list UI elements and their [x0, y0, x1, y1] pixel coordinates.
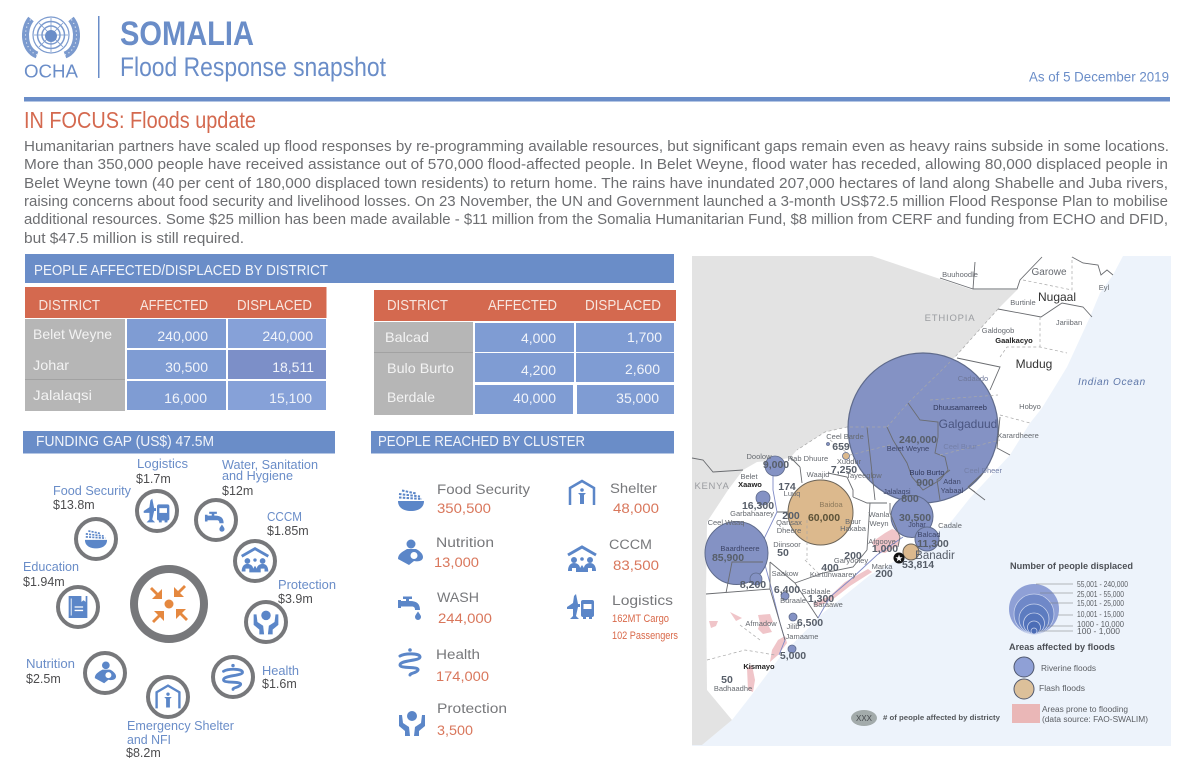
map: legend, number of people displaced: 55,001 - 240,000: [1077, 580, 1128, 589]
cluster: protection: Protection: [437, 701, 507, 716]
map: district values: 659: [832, 441, 850, 453]
map: place names: Jamaame: [786, 632, 818, 641]
table: right districts: Balcad: [385, 329, 429, 345]
map: legend, areas affected by floods: Riverine floods: [1041, 664, 1096, 673]
map: place names: Hakaba: [840, 524, 867, 533]
map: place names: Cadaado: [958, 374, 988, 383]
table: left districts: Belet Weyne: [33, 326, 112, 342]
funding: logistics: $1.7m: [136, 472, 171, 486]
map: place names: Afgooye: [868, 537, 896, 546]
map: place names: Mudug: [1016, 357, 1052, 371]
panel: funding gap wheel: [23, 457, 336, 760]
heading: funding gap: FUNDING GAP (US$) 47.5M: [36, 434, 214, 450]
funding: CCCM: $1.85m: [267, 524, 309, 538]
funding: water, sanitation and hygiene: [196, 458, 318, 540]
map: place names: Ceel Dheer: [964, 466, 1002, 475]
map: bubble Baardheere: [705, 522, 768, 584]
map: place names: Baidoa: [819, 500, 844, 509]
subtitle: Flood Response snapshot: [120, 52, 386, 82]
map: place names: Indian Ocean: [1078, 377, 1146, 388]
cluster: logistics: 102 Passengers: [612, 630, 678, 642]
map: place names: Bulo Burto: [909, 468, 945, 477]
map: place names: Garbahaarey: [730, 509, 774, 518]
heading: people affected/displaced by district: PEOPLE AFFECTED/DISPLACED BY DISTRICT: [34, 263, 328, 279]
map: place names: Diinsoor: [773, 540, 801, 549]
table: right districts: 40,000: [513, 390, 556, 406]
header rule: [24, 97, 1170, 102]
map: bubble Belet Weyne / Galgaduud: [848, 353, 998, 503]
funding: water, sanitation and hygiene: $12m: [222, 484, 253, 498]
map: place names: Xuddur: [837, 457, 862, 466]
map: district values: 53,814: [902, 559, 934, 571]
table: left districts: 15,100: [269, 390, 312, 406]
map: place names: Adan: [943, 477, 961, 486]
funding: education: Education: [23, 560, 79, 574]
map: neighbouring countries: [692, 256, 1017, 745]
funding: education: $1.94m: [23, 575, 65, 589]
panel: people reached by cluster: [398, 481, 678, 738]
cluster: food security: 350,500: [437, 501, 491, 516]
heading: funding gap: [23, 431, 335, 454]
text block: in focus paragraph: Belet Weyne town (40 per cent of 180,000 displaced town residents) to return home. The rains have inundated 207,000 hectares of land along Shabelle and Juba rivers,: [24, 176, 1168, 192]
table: left districts: 240,000: [262, 328, 313, 344]
map: small bubbles: [750, 442, 850, 653]
cluster: food security: [398, 482, 530, 516]
map: district values: 6,400: [774, 584, 800, 596]
map: place names: Badhaadhe: [714, 684, 752, 693]
funding: CCCM: CCCM: [267, 510, 302, 524]
table: right districts: 4,000: [521, 330, 556, 346]
map: district values: 174: [778, 481, 796, 493]
map: legend, areas affected by floods: Areas affected by floods: [1009, 642, 1115, 653]
heading: people reached by cluster: [371, 431, 674, 454]
funding: health: Health: [262, 664, 299, 678]
map: place names: [694, 267, 1146, 693]
funding: emergency shelter and NFI: and NFI: [127, 733, 171, 747]
funding: food security: [53, 484, 132, 559]
map: place names: KENYA: [694, 481, 730, 492]
table: right districts: 1,700: [627, 329, 662, 345]
map: district values: 7,250: [831, 464, 857, 476]
map: legend, number of people displaced: Number of people displaced: [1010, 561, 1133, 572]
map: place names: Luuq: [784, 489, 800, 498]
map: district values: 200: [782, 510, 800, 522]
cluster: health: 174,000: [436, 669, 489, 684]
cluster: nutrition: [398, 535, 494, 570]
cluster: WASH: WASH: [437, 590, 479, 605]
map: place names: Weyn: [869, 519, 889, 528]
table: right districts: 2,600: [625, 361, 660, 377]
map: district values: 200: [875, 568, 893, 580]
map: capital marker: [894, 552, 904, 564]
map: legend, number of people displaced: 10,001 - 15,000: [1077, 610, 1124, 619]
map: district values: 60,000: [808, 512, 840, 524]
funding: water, sanitation and hygiene: and Hygiene: [222, 469, 293, 483]
logo wordmark: OCHA: [24, 62, 78, 82]
table: right districts: 35,000: [616, 390, 659, 406]
map: place names: Sablaale: [801, 587, 831, 596]
map: place names: Kurtunwaarey: [810, 570, 856, 579]
heading: in focus: IN FOCUS: Floods update: [24, 107, 256, 133]
map: bubble Baidoa: [788, 480, 853, 545]
funding: logistics: [136, 457, 188, 531]
table: right districts: AFFECTED: [488, 298, 557, 314]
map: district values: 900: [916, 477, 934, 489]
table: left districts: Jalalaqsi: [33, 387, 92, 403]
cluster: CCCM: [568, 537, 659, 573]
map: place names: Yabaal: [941, 486, 964, 495]
map: legend, people affected by district: XXX: [856, 714, 873, 723]
map: place names: Dheere: [777, 526, 801, 535]
map: bubble Johar: [891, 496, 933, 538]
map: place names: Xarardheere: [997, 431, 1039, 440]
table: right districts: Bulo Burto: [387, 360, 454, 376]
cluster: health: [400, 647, 489, 684]
cluster: WASH: [398, 590, 492, 626]
map: legend, areas affected by floods: Areas prone to flooding: [1042, 705, 1128, 714]
funding: protection: [246, 578, 336, 642]
map: place names: ETHIOPIA: [925, 313, 975, 324]
map: bubble Balcad: [915, 527, 939, 551]
table: left districts: DISTRICT: [38, 298, 100, 314]
map: place names: Nugaal: [1038, 290, 1076, 304]
map: place names: Jariiban: [1056, 318, 1082, 327]
header divider: [98, 16, 100, 78]
map: place names: Garyooley: [834, 556, 868, 565]
map: admin boundaries: [692, 257, 1113, 660]
map: district values: 85,900: [712, 552, 744, 564]
map: place names: Tayeeglow: [846, 471, 882, 480]
map: legend, areas affected by floods: [1009, 642, 1148, 724]
table: left districts: 30,500: [165, 359, 208, 375]
cluster: nutrition: 13,000: [434, 555, 479, 570]
date: As of 5 December 2019: [1029, 70, 1169, 84]
map: district values: 5,000: [780, 650, 806, 662]
table: left districts: DISPLACED: [237, 298, 312, 314]
map: district values: 9,000: [763, 459, 789, 471]
map: district values: 8,200: [740, 579, 766, 591]
map: place names: Buur: [845, 517, 861, 526]
map: place names: Saakow: [772, 569, 799, 578]
map of Somalia: [692, 256, 1171, 746]
cluster: CCCM: 83,500: [613, 558, 659, 573]
map: district values: 50: [721, 674, 733, 686]
text block: in focus paragraph: raising concerns about food security and livelihood losses. On 23 November, the UN and Government launched a 3-month US$72.5 million Flood Response Plan to mobilise: [24, 194, 1168, 210]
cluster: health: Health: [436, 647, 480, 662]
map: place names: Gaalkacyo: [995, 336, 1033, 345]
cluster: CCCM: CCCM: [609, 537, 652, 552]
table: left districts: AFFECTED: [140, 298, 208, 314]
table: right districts: [374, 290, 676, 415]
map: legend, people affected by district: [851, 710, 1001, 726]
map: legend, number of people displaced: [1009, 561, 1133, 636]
map: place names: Balcad: [918, 530, 940, 539]
funding: emergency shelter and NFI: $8.2m: [126, 746, 161, 760]
cluster: WASH: 244,000: [438, 611, 492, 626]
map: place names: Dhuusamarreeb: [933, 403, 987, 412]
table: left districts: Johar: [33, 357, 69, 373]
map: place names: Afmadow: [745, 619, 777, 628]
map: place names: Jalalaqsi: [883, 489, 911, 496]
map: place names: Eyl: [1099, 283, 1110, 292]
map: district values: 1,000: [872, 543, 898, 555]
map: legend, areas affected by floods: (data source: FAO-SWALIM): [1042, 715, 1148, 724]
map: district values: 1,300: [808, 593, 834, 605]
map: place names: Marka: [872, 562, 893, 571]
funding: protection: Protection: [278, 578, 336, 592]
funding: education: [23, 560, 98, 627]
table: left districts: [25, 287, 326, 411]
funding: emergency shelter and NFI: [126, 677, 234, 760]
map: place names: Johar: [908, 522, 926, 529]
text block: in focus paragraph: Humanitarian partners have scaled up flood responses by re-programming available resources, but significant gaps remain even as heavy rains subside in some locations.: [24, 139, 1169, 155]
table: right districts: DISTRICT: [387, 298, 448, 314]
table: left districts: 18,511: [272, 359, 314, 375]
map: place names: Burtinle: [1010, 298, 1036, 307]
table: left districts: 16,000: [164, 390, 207, 406]
map: place names: Waajid: [807, 470, 829, 479]
map: legend, areas affected by floods: Flash floods: [1039, 684, 1085, 693]
map: district values: 6,500: [797, 617, 823, 629]
table: right districts: DISPLACED: [585, 298, 661, 314]
funding: nutrition: [26, 653, 125, 693]
funding: food security: Food Security: [53, 484, 132, 498]
cluster: logistics: 162MT Cargo: [612, 613, 669, 625]
heading: people reached by cluster: PEOPLE REACHED BY CLUSTER: [378, 434, 585, 450]
funding: food security: $13.8m: [53, 498, 95, 512]
map: place names: Buraale: [780, 596, 806, 605]
text block: in focus paragraph: but $47.5 million is still required.: [24, 231, 244, 247]
map: district values: 200: [844, 550, 862, 562]
map: place names: Baardheere: [720, 544, 760, 553]
icon: central convergence: [134, 569, 204, 639]
cluster: logistics: Logistics: [612, 593, 673, 608]
map: district values: 30,500: [899, 512, 931, 524]
text block: in focus paragraph: [24, 139, 1169, 247]
funding: water, sanitation and hygiene: Water, Sanitation: [222, 458, 318, 472]
header: [24, 15, 1170, 102]
funding: health: $1.6m: [262, 677, 297, 691]
map: place names: Ceel Buur: [943, 442, 977, 451]
map: place names: Kismayo: [743, 662, 775, 671]
map: district values: 800: [901, 493, 919, 505]
map: rivers: [760, 470, 903, 655]
cluster: shelter: [570, 481, 659, 516]
map: place names: Garowe: [1031, 267, 1067, 278]
heading: people affected/displaced by district: [25, 254, 674, 283]
map: place names: Hobyo: [1019, 402, 1041, 411]
map: bubble Banadir: [903, 544, 919, 560]
table: left districts: 240,000: [157, 328, 208, 344]
cluster: shelter: Shelter: [610, 481, 658, 496]
text block: in focus paragraph: More than 350,000 people have received assistance out of 570,000 flood-affected people. In Belet Weyne, flood water has receded, allowing 80,000 displaced people in: [24, 157, 1168, 173]
map: district values: 16,300: [742, 500, 774, 512]
cluster: shelter: 48,000: [613, 501, 659, 516]
cluster: protection: 3,500: [437, 723, 473, 738]
map: district values: Banadir: [915, 550, 955, 562]
map: place names: Baraawe: [813, 600, 843, 609]
map: place names: Doolow: [746, 452, 772, 461]
map: place names: Jilib: [787, 622, 799, 631]
map: flood prone areas: [709, 529, 900, 692]
funding: health: [213, 657, 299, 697]
funding: emergency shelter and NFI: Emergency Shelter: [127, 719, 234, 733]
map: legend, number of people displaced: 15,001 - 25,000: [1077, 599, 1124, 608]
map: place names: Cadale: [938, 521, 962, 530]
map: legend, number of people displaced: 25,001 - 55,000: [1077, 590, 1124, 599]
map: ocean background: [692, 256, 1171, 746]
map: place names: Wanla: [869, 510, 890, 519]
map: place names: Ceel Waaq: [708, 518, 744, 527]
map: place names: Qansax: [776, 518, 802, 527]
map: district values: [712, 434, 955, 686]
map: district values: 400: [821, 562, 839, 574]
cluster: food security: Food Security: [437, 482, 530, 497]
funding: CCCM: [235, 510, 309, 581]
icon: UN OCHA emblem: [25, 17, 77, 55]
map: district values: 50: [777, 547, 789, 559]
cluster: protection: [399, 701, 507, 738]
map: place names: Rab Dhuure: [788, 454, 828, 463]
map: place names: Ceel Barde: [826, 432, 864, 441]
map: place names: Belet: [740, 472, 758, 481]
title: SOMALIA: [120, 15, 254, 53]
map: legend, number of people displaced: 100 - 1,000: [1077, 627, 1121, 636]
map: place names: Galgaduud: [939, 417, 997, 431]
funding: nutrition: $2.5m: [26, 672, 61, 686]
map: district values: 240,000: [899, 434, 937, 446]
table: right districts: 4,200: [521, 362, 556, 378]
table: right districts: Berdale: [387, 389, 435, 405]
cluster: nutrition: Nutrition: [436, 535, 494, 550]
map: legend, people affected by district: # of people affected by districty: [883, 713, 1001, 722]
funding: nutrition: Nutrition: [26, 657, 75, 671]
funding: protection: $3.9m: [278, 592, 313, 606]
map: legend, number of people displaced: 1000 - 10,000: [1077, 620, 1125, 629]
map: place names: Galdogob: [982, 326, 1014, 335]
map: place names: Xaawo: [738, 480, 762, 489]
text block: in focus paragraph: additional resources. Some $25 million has been made available - $11 million from the Somalia Humanitarian Fund, $8 million from CERF and funding from ECHO and DFID,: [24, 212, 1168, 228]
funding: logistics: Logistics: [137, 457, 188, 471]
map: place names: Belet Weyne: [887, 444, 929, 453]
map: place names: Buuhoodle: [942, 270, 978, 279]
map: Somalia land: [692, 256, 1123, 745]
cluster: logistics: [567, 593, 678, 642]
map: district values: 11,300: [917, 538, 949, 550]
